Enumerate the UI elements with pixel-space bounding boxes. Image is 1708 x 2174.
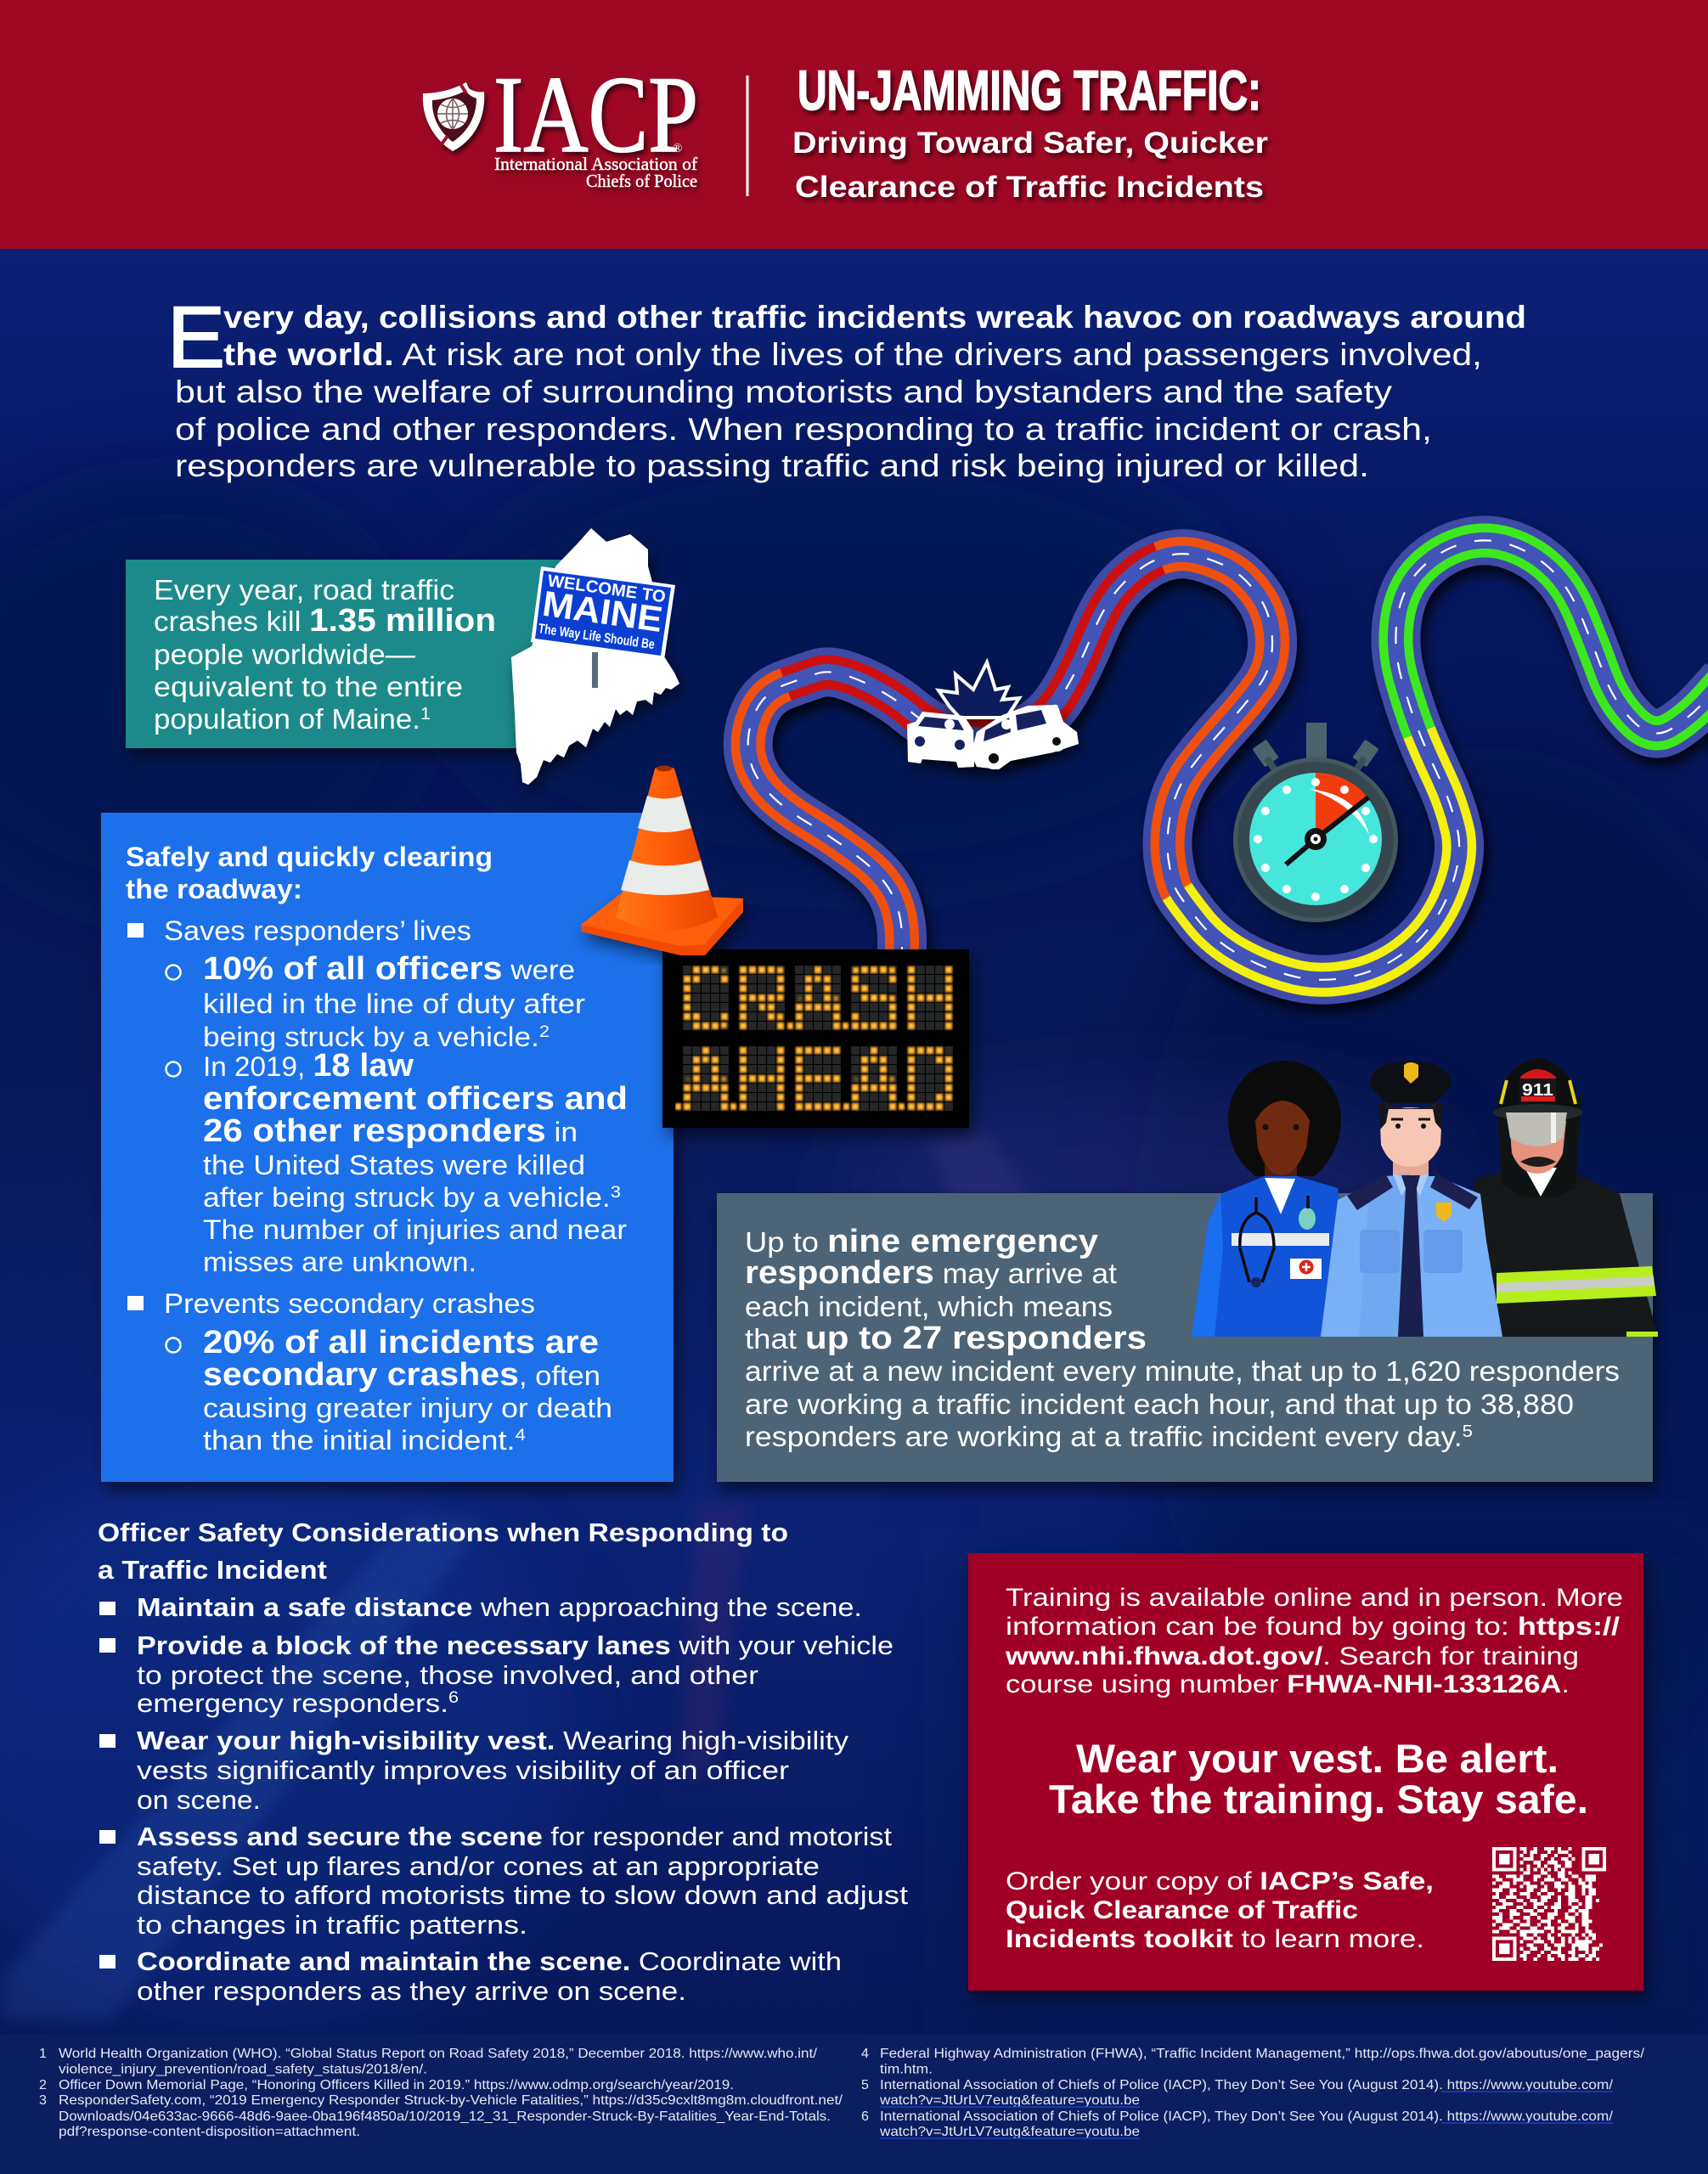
panel: Maine statistic (126, 560, 567, 748)
list: saves responders' lives: Saves responders’ lives (164, 915, 471, 946)
header band (0, 0, 1708, 249)
toolkit order text: Order your copy of IACP’s Safe, (1006, 1867, 1434, 1895)
list: saves responders' lives: being struck by a vehicle. (203, 1022, 508, 1052)
list: prevents secondary crashes: 20% of all incidents are (203, 1325, 599, 1360)
section heading (98, 1518, 788, 1585)
slogan: Wear your vest. Be alert. (1076, 1736, 1559, 1781)
list: prevents secondary crashes: Prevents secondary crashes (164, 1288, 535, 1319)
LED sign: crash ahead (662, 949, 969, 1141)
panel heading (126, 842, 493, 904)
panel: nine emergency responders: that up to 27 responders (745, 1321, 1147, 1356)
footnotes column two: 4 (861, 2047, 869, 2061)
list item: block lanes: Provide a block of the necessary lanes with your vehicle (137, 1630, 893, 1660)
road surface (748, 540, 1708, 980)
list item: block lanes: 6 (448, 1689, 459, 1707)
icon: welcome to Maine road sign: WELCOME TO (546, 572, 667, 606)
icon: welcome to Maine road sign: MAINE (540, 583, 665, 639)
illustration: firefighter (1468, 1058, 1658, 1337)
IACP logo: ® (673, 142, 682, 155)
icon: welcome to Maine road sign: The Way Life Should Be (538, 622, 656, 652)
list: prevents secondary crashes: 4 (516, 1426, 526, 1445)
list item: block lanes: to protect the scene, those involved, and other (137, 1660, 758, 1690)
slogan (1049, 1736, 1588, 1822)
title: Clearance of Traffic Incidents (795, 171, 1264, 204)
list item: assess and secure: to changes in traffic patterns. (137, 1910, 527, 1940)
list: saves responders' lives: In 2019, 18 law (203, 1048, 414, 1084)
footnotes (0, 2035, 1708, 2174)
logo tagline: Chiefs of Police (586, 171, 697, 191)
toolkit order text (1006, 1867, 1434, 1953)
panel: nine emergency responders: responders may arrive at (745, 1255, 1117, 1291)
list: saves responders' lives: 26 other responders in (203, 1113, 578, 1149)
footnotes column one: Officer Down Memorial Page, “Honoring Officers Killed in 2019.” https://www.odmp.org/search/year/2019. (59, 2078, 734, 2092)
intro paragraph: but also the welfare of surrounding motorists and bystanders and the safety (175, 375, 1393, 409)
list item: assess and secure: Assess and secure the scene for responder and motorist (137, 1822, 892, 1851)
footnotes column one: violence_injury_prevention/road_safety_status/2018/en/. (59, 2062, 427, 2077)
list: saves responders' lives: the United States were killed (203, 1150, 585, 1180)
IACP logo (423, 54, 698, 191)
footnotes column two: 6 (861, 2109, 869, 2124)
panel: nine emergency responders: Up to nine emergency (745, 1224, 1098, 1259)
face with visor (1509, 1121, 1566, 1174)
footnotes column one: pdf?response-content-disposition=attachment. (59, 2125, 360, 2139)
IACP wordmark: IACP (493, 54, 698, 175)
icon: welcome to Maine road sign (531, 566, 675, 688)
footnotes column two: watch?v=JtUrLV7eutg&feature=youtu.be (879, 2125, 1140, 2139)
footnotes column one: Downloads/04e633ac-9666-48d6-9aee-0ba196f4850a/10/2019_12_31_Responder-Struck-By-Fatalities_Year-End-Totals. (59, 2109, 831, 2124)
list: prevents secondary crashes: secondary crashes , often (203, 1357, 600, 1393)
training text: course using number FHWA-NHI-133126A . (1006, 1670, 1570, 1698)
road centre lane (748, 540, 1708, 980)
panel: nine emergency responders: are working a traffic incident each hour, and that up to 38,880 (745, 1388, 1574, 1420)
list: prevents secondary crashes: than the initial incident. (203, 1425, 480, 1456)
list item: assess and secure: distance to afford motorists time to slow down and adjust (137, 1880, 908, 1910)
footnotes column one: 2 (39, 2078, 47, 2092)
list: prevents secondary crashes (127, 1288, 612, 1456)
list item: assess and secure: safety. Set up flares and/or cones at an appropriate (137, 1851, 820, 1881)
list item: block lanes (99, 1630, 893, 1718)
panel: nine emergency responders: arrive at a new incident every minute, that up to 1,620 responders (745, 1355, 1620, 1387)
illustration: police officer (1321, 1061, 1502, 1337)
footnotes column one: 1 (39, 2047, 47, 2061)
road centre dashes (748, 540, 1708, 980)
icon: traffic cone (581, 766, 743, 955)
title: UN-JAMMING TRAFFIC: (798, 59, 1261, 121)
list item: assess and secure (99, 1822, 908, 1940)
logo tagline (494, 154, 697, 191)
list: saves responders' lives: 3 (611, 1183, 621, 1202)
panel: nine emergency responders: each incident, which means (745, 1291, 1113, 1322)
footnotes column two: Federal Highway Administration (FHWA), “Traffic Incident Management,” http://ops.fhwa.dot.gov/aboutus/one_pagers/ (880, 2047, 1645, 2061)
list: saves responders' lives: misses are unknown. (203, 1247, 476, 1277)
list item: high-visibility vest: vests significantly improves visibility of an officer (137, 1755, 789, 1785)
toolkit order text: Quick Clearance of Traffic (1006, 1896, 1358, 1924)
intro paragraph: the world. At risk are not only the lives of the drivers and passengers involved, (223, 337, 1482, 372)
panel: training call to action (968, 1553, 1643, 1991)
left car (907, 712, 974, 768)
icon: crashing cars with burst (907, 662, 1079, 769)
road illustration (748, 540, 1708, 988)
toolkit order text: Incidents toolkit to learn more. (1006, 1925, 1424, 1953)
icon: Maine state silhouette (511, 528, 679, 785)
list: saves responders' lives (127, 915, 628, 1277)
panel: safely and quickly clearing the roadway (101, 813, 674, 1482)
helmet (1499, 1058, 1576, 1109)
officer safety considerations (98, 1518, 908, 2006)
road traffic colour bands (748, 540, 1708, 980)
list item: maintain distance: Maintain a safe distance when approaching the scene. (137, 1592, 862, 1622)
panel: nine emergency responders: 5 (1463, 1422, 1473, 1441)
list item: high-visibility vest (99, 1726, 849, 1815)
icon: stopwatch (1233, 723, 1403, 929)
footnotes column two (861, 2047, 1645, 2139)
footnotes column two: International Association of Chiefs of Police (IACP), They Don’t See You (August 2014). https://www.youtube.com/ (880, 2109, 1614, 2124)
footnotes column two: International Association of Chiefs of Police (IACP), They Don’t See You (August 2014). https://www.youtube.com/ (880, 2078, 1614, 2092)
panel: Maine statistic: crashes kill 1.35 million (154, 603, 496, 639)
ID badge (1290, 1259, 1322, 1279)
training text: www.nhi.fhwa.dot.gov/ . Search for training (1005, 1642, 1579, 1670)
icon: IACP shield with globe (423, 82, 484, 151)
title (792, 59, 1268, 204)
drop cap: E (167, 289, 225, 386)
footnotes column two: watch?v=JtUrLV7eutg&feature=youtu.be (879, 2093, 1140, 2108)
panel: nine emergency responders: responders are working at a traffic incident every day. (745, 1421, 1407, 1452)
panel: Maine statistic: 1 (420, 704, 431, 724)
panel heading: the roadway: (126, 874, 302, 904)
section heading: a Traffic Incident (98, 1555, 327, 1585)
list item: coordinate: other responders as they arrive on scene. (137, 1976, 686, 2006)
list: prevents secondary crashes: causing greater injury or death (203, 1393, 612, 1423)
list: saves responders' lives: enforcement officers and (203, 1081, 628, 1117)
illustration: firefighter: 911 (1522, 1081, 1553, 1100)
list item: high-visibility vest: on scene. (137, 1785, 261, 1815)
illustration: paramedic (1192, 1061, 1341, 1337)
footnotes column one (39, 2047, 843, 2139)
list item: coordinate: Coordinate and maintain the scene. Coordinate with (137, 1946, 842, 1976)
LED sign: crash ahead: AHEAD (678, 1031, 958, 1141)
panel: Maine statistic: people worldwide— (154, 639, 415, 670)
intro paragraph: of police and other responders. When responding to a traffic incident or crash, (175, 412, 1432, 447)
footnotes column two: 5 (861, 2078, 869, 2092)
panel: Maine statistic: Every year, road traffic (154, 574, 454, 605)
burst (939, 662, 1019, 718)
panel: Maine statistic: equivalent to the entire (154, 671, 463, 702)
road shadow (753, 549, 1708, 988)
slogan: Take the training. Stay safe. (1049, 1777, 1588, 1822)
training text: information can be found by going to: https:// (1006, 1613, 1621, 1641)
footnotes column two: tim.htm. (880, 2062, 933, 2077)
footnotes column one: ResponderSafety.com, “2019 Emergency Responder Struck-by-Vehicle Fatalities,” https://d35c9cxlt8mg8m.cloudfront.net/ (59, 2093, 843, 2108)
logo tagline: International Association of (494, 154, 697, 174)
list: saves responders' lives: 10% of all officers were (203, 951, 575, 987)
list item: coordinate (99, 1946, 842, 2006)
QR code (1492, 1847, 1606, 1961)
officer hat (1369, 1061, 1452, 1103)
list: saves responders' lives: after being struck by a vehicle. (203, 1182, 570, 1213)
panel heading: Safely and quickly clearing (126, 842, 493, 872)
list: saves responders' lives: The number of injuries and near (203, 1214, 627, 1245)
LED sign: crash ahead: CRASH (678, 950, 958, 1060)
footnotes column one: 3 (39, 2093, 47, 2108)
intro paragraph (167, 289, 1526, 483)
intro paragraph: very day, collisions and other traffic incidents wreak havoc on roadways around (223, 300, 1526, 335)
panel: nine emergency responders (717, 1193, 1653, 1482)
high-visibility stripes (1497, 1266, 1656, 1304)
list: saves responders' lives: killed in the line of duty after (203, 988, 585, 1019)
panel: Maine statistic: population of Maine. (154, 703, 406, 735)
list item: high-visibility vest: Wear your high-visibility vest. Wearing high-visibility (137, 1726, 849, 1755)
training text (1005, 1584, 1623, 1698)
stethoscope (1240, 1196, 1308, 1282)
right car (971, 705, 1079, 769)
training text: Training is available online and in person. More (1006, 1584, 1623, 1612)
section heading: Officer Safety Considerations when Responding to (98, 1518, 788, 1547)
footnotes column one: World Health Organization (WHO). “Global Status Report on Road Safety 2018,” December 2018. https://www.who.int/ (59, 2047, 818, 2061)
list item: block lanes: emergency responders. (137, 1688, 414, 1718)
title: Driving Toward Safer, Quicker (792, 127, 1268, 160)
list: saves responders' lives: 2 (539, 1022, 550, 1041)
intro paragraph: responders are vulnerable to passing traffic and risk being injured or killed. (175, 448, 1369, 483)
